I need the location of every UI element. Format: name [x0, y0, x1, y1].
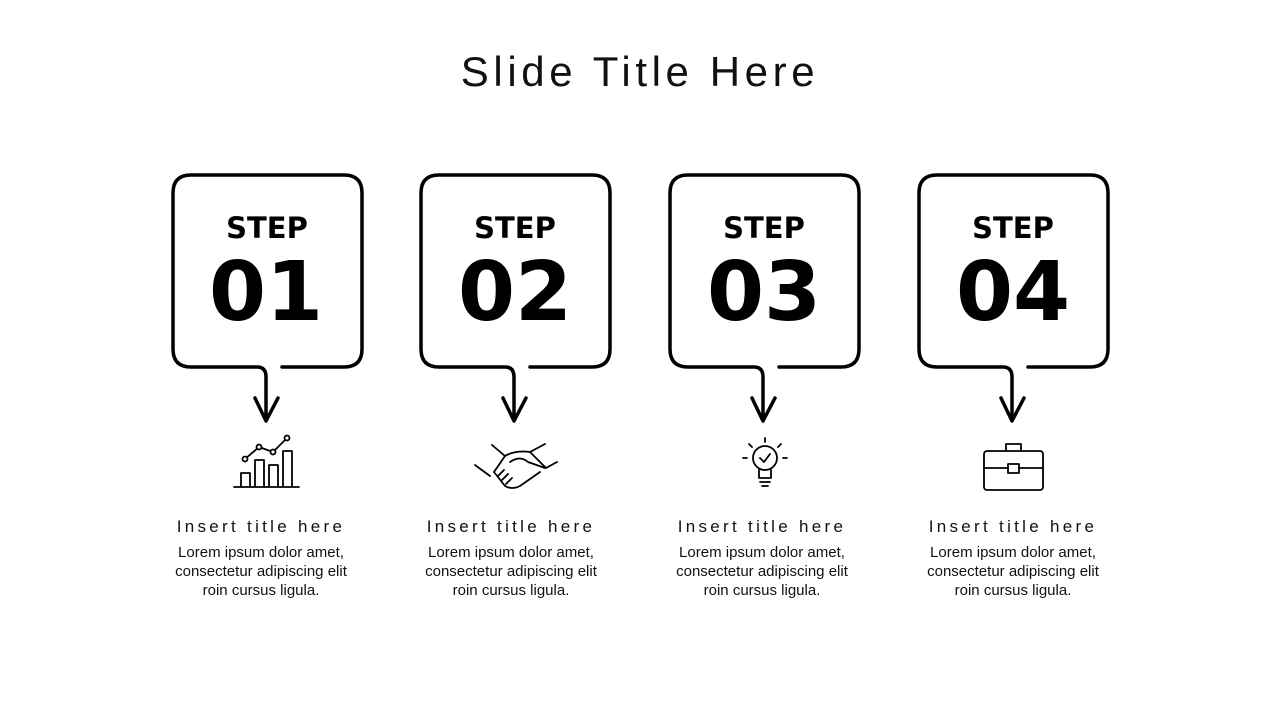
- caption 1: [175, 517, 347, 599]
- caption 4: consectetur adipiscing elit: [927, 563, 1099, 580]
- caption 3: consectetur adipiscing elit: [676, 563, 848, 580]
- caption 2: Insert title here: [427, 517, 595, 536]
- step 4 box: [919, 175, 1108, 421]
- step 4 box: STEP: [972, 211, 1054, 245]
- step 1 box: [173, 175, 362, 421]
- caption 2: roin cursus ligula.: [453, 582, 569, 599]
- step 3 box: 03: [707, 245, 821, 340]
- step 2 box: [421, 175, 610, 421]
- step 2 box: STEP: [474, 211, 556, 245]
- icon: briefcase: [984, 444, 1043, 490]
- caption 3: roin cursus ligula.: [704, 582, 820, 599]
- step 1 box: 01: [209, 245, 323, 340]
- caption 1: roin cursus ligula.: [203, 582, 319, 599]
- caption 1: Lorem ipsum dolor amet,: [178, 544, 344, 561]
- caption 3: Insert title here: [678, 517, 846, 536]
- caption 1: Insert title here: [177, 517, 345, 536]
- step 3 box: [670, 175, 859, 421]
- step 4 box: 04: [956, 245, 1070, 340]
- step 2 box: 02: [458, 245, 572, 340]
- icon: handshake: [475, 444, 557, 488]
- icon: lightbulb: [743, 438, 787, 486]
- caption 2: [425, 517, 597, 599]
- caption 4: roin cursus ligula.: [955, 582, 1071, 599]
- caption 1: consectetur adipiscing elit: [175, 563, 347, 580]
- icon: chart: [234, 436, 299, 487]
- caption 3: Lorem ipsum dolor amet,: [679, 544, 845, 561]
- step 3 box: STEP: [723, 211, 805, 245]
- caption 4: [927, 517, 1099, 599]
- title: Slide Title Here: [461, 48, 819, 95]
- caption 2: consectetur adipiscing elit: [425, 563, 597, 580]
- caption 4: Insert title here: [929, 517, 1097, 536]
- caption 2: Lorem ipsum dolor amet,: [428, 544, 594, 561]
- caption 4: Lorem ipsum dolor amet,: [930, 544, 1096, 561]
- step 1 box: STEP: [226, 211, 308, 245]
- caption 3: [676, 517, 848, 599]
